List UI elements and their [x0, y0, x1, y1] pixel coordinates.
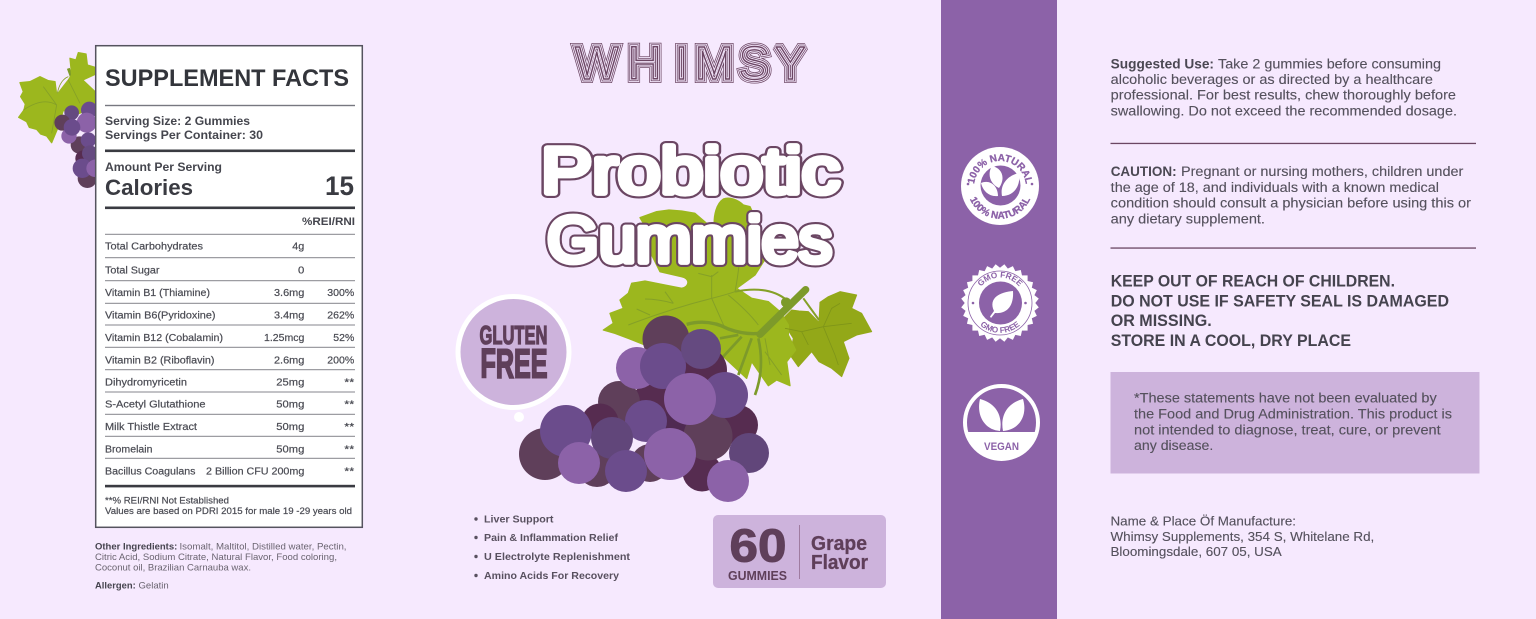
badge: 100% natural: 100% NATURAL: [968, 154, 1032, 184]
badge: gmo free: GMO FREE: [978, 272, 1023, 286]
caution: Pregnant or nursing mothers, children under: [1181, 164, 1464, 179]
nutrient table: Milk Thistle Extract: [105, 422, 197, 433]
large leaf: [603, 198, 796, 386]
fda disclaimer box: not intended to diagnose, treat, cure, or prevent: [1134, 422, 1441, 437]
nutrient table: 3.4mg: [274, 311, 304, 322]
footnote: [105, 496, 352, 516]
suggested use: [1111, 56, 1457, 118]
nutrient table: Vitamin B2 (Riboflavin): [105, 355, 214, 366]
badge: vegan: VEGAN: [984, 441, 1019, 453]
other ingredients: [95, 542, 346, 572]
footnote: Values are based on PDRI 2015 for male 19 -29 years old: [105, 506, 352, 516]
nutrient table: 3.6mg: [274, 288, 304, 299]
nutrient table: 300%: [327, 288, 354, 299]
nutrient table: 4g: [292, 242, 304, 253]
calories block: 15: [325, 171, 354, 201]
fda disclaimer box: the Food and Drug Administration. This product is: [1134, 406, 1452, 421]
brand logo: whimsy: WHIMSY: [575, 37, 806, 89]
caution: CAUTION:: [1111, 164, 1177, 179]
benefits list: Amino Acids For Recovery: [484, 570, 619, 582]
product title: Gummies: [547, 203, 832, 276]
count: 60: [730, 520, 786, 572]
nutrient table: 50mg: [276, 400, 304, 411]
serving information: Serving Size: 2 Gummies: [105, 114, 250, 128]
badge: gluten free: GLUTEN: [480, 320, 548, 350]
nutrient table: **: [344, 466, 354, 477]
badge: 100% natural: 100% NATURAL: [970, 196, 1030, 219]
suggested use: swallowing. Do not exceed the recommended dosage.: [1111, 103, 1457, 118]
nutrient table: Bromelain: [105, 444, 152, 455]
brand logo: whimsy: WHIMSY: [575, 37, 806, 89]
allergen: Allergen:: [95, 580, 136, 590]
other ingredients: Other Ingredients:: [95, 542, 177, 552]
benefits list: U Electrolyte Replenishment: [484, 551, 631, 563]
small leaf: [782, 292, 872, 377]
nutrient table: Vitamin B12 (Cobalamin): [105, 333, 223, 344]
allergen: [95, 580, 169, 590]
calories block: Calories: [105, 175, 193, 200]
badge: gluten free: [458, 296, 569, 422]
nutrient table: **: [344, 400, 354, 411]
calories block: [105, 160, 354, 201]
benefits list: Liver Support: [484, 514, 554, 526]
nutrient table: 262%: [327, 311, 354, 322]
fda disclaimer box: [1110, 372, 1480, 474]
suggested use: Take 2 gummies before consuming: [1218, 56, 1441, 71]
nutrient table: 52%: [333, 333, 354, 344]
caution: the age of 18, and individuals with a known medical: [1111, 180, 1439, 195]
count and flavor box: Flavor: [811, 552, 868, 574]
stem: [735, 290, 819, 320]
calories block: Amount Per Serving: [105, 160, 222, 174]
nutrient table: 50mg: [276, 444, 304, 455]
storage warning: [1111, 273, 1449, 350]
suggested use: alcoholic beverages or as directed by a healthcare: [1111, 72, 1433, 87]
badge: vegan: [965, 386, 1038, 459]
other ingredients: Citric Acid, Sodium Citrate, Natural Flavor, Food coloring,: [95, 552, 337, 562]
count and flavor box: GUMMIES: [728, 569, 787, 583]
brand logo: whimsy: WHIMSY: [575, 37, 806, 89]
nutrient table: Vitamin B6(Pyridoxine): [105, 311, 216, 322]
nutrient table: Vitamin B1 (Thiamine): [105, 288, 210, 299]
product title: Probiotic: [541, 134, 840, 207]
storage warning: KEEP OUT OF REACH OF CHILDREN.: [1111, 273, 1395, 291]
fda disclaimer box: any disease.: [1134, 438, 1213, 453]
nutrient table: Total Sugar: [105, 265, 160, 276]
badge: gluten free: FREE: [480, 340, 548, 386]
storage warning: DO NOT USE IF SAFETY SEAL IS DAMAGED: [1111, 293, 1449, 311]
nutrient table: 2.6mg: [274, 355, 304, 366]
serving information: [105, 114, 263, 142]
nutrient table: S-Acetyl Glutathione: [105, 400, 206, 411]
panel: purple badge stripe: [941, 0, 1057, 619]
grape leaves and stem: [603, 198, 872, 395]
veins: [628, 255, 782, 375]
manufacturer details: Bloomingsdale, 607 05, USA: [1110, 545, 1282, 559]
heading: supplement facts: SUPPLEMENT FACTS: [105, 65, 349, 92]
nutrient table: **: [344, 444, 354, 455]
nutrient table: Dihydromyricetin: [105, 377, 187, 388]
caution: any dietary supplement.: [1111, 211, 1265, 226]
badge: gmo free: GMO FREE: [981, 321, 1020, 333]
footnote: **% REI/RNI Not Established: [105, 496, 229, 506]
manufacturer details: Whimsy Supplements, 354 S, Whitelane Rd,: [1110, 530, 1374, 544]
nutrient table: 2 Billion CFU 200mg: [206, 466, 304, 477]
nutrient table: 200%: [327, 355, 354, 366]
nutrient table: **: [344, 422, 354, 433]
serving information: Servings Per Container: 30: [105, 128, 263, 142]
nutrient table: Bacillus Coagulans: [105, 466, 196, 477]
panel: supplement facts: [96, 46, 362, 527]
count and flavor box: [713, 515, 886, 588]
manufacturer details: Name & Place Öf Manufacture:: [1110, 515, 1296, 529]
nutrient table: 50mg: [276, 422, 304, 433]
small grape illustration: [19, 53, 104, 188]
caution: condition should consult a physician before using this or: [1111, 196, 1472, 211]
product title: Probiotic: [541, 134, 840, 207]
other ingredients: Coconut oil, Brazilian Carnauba wax.: [95, 562, 251, 572]
benefits list: [474, 514, 631, 582]
nutrient table: 0: [298, 265, 305, 276]
nutrient table: Total Carbohydrates: [105, 242, 203, 253]
brand logo: whimsy: WHIMSY: [575, 37, 806, 89]
other ingredients: Isomalt, Maltitol, Distilled water, Pectin,: [180, 542, 346, 552]
nutrient table: **: [344, 377, 354, 388]
suggested use: Suggested Use:: [1111, 56, 1214, 71]
badge: 100% natural: [961, 147, 1039, 225]
allergen: Gelatin: [138, 580, 169, 590]
flavor: Grape: [811, 533, 867, 555]
grape bunch: [519, 316, 769, 502]
nutrient table: 1.25mcg: [264, 333, 304, 344]
product title: Gummies: [547, 203, 832, 276]
brand logo: whimsy: WHIMSY: [575, 37, 806, 89]
benefits list: Pain & Inflammation Relief: [484, 532, 618, 544]
nutrient table: [105, 242, 354, 477]
nutrient table: 25mg: [276, 377, 304, 388]
caution: [1111, 164, 1472, 226]
fda disclaimer box: *These statements have not been evaluated by: [1134, 391, 1437, 406]
product title: [541, 134, 840, 276]
storage warning: STORE IN A COOL, DRY PLACE: [1111, 332, 1351, 350]
storage warning: OR MISSING.: [1111, 312, 1212, 330]
column heading: %REI/RNI: [302, 216, 355, 228]
badge: gmo free: [961, 264, 1039, 342]
manufacturer details: [1110, 515, 1374, 559]
suggested use: professional. For best results, chew thoroughly before: [1111, 88, 1456, 103]
